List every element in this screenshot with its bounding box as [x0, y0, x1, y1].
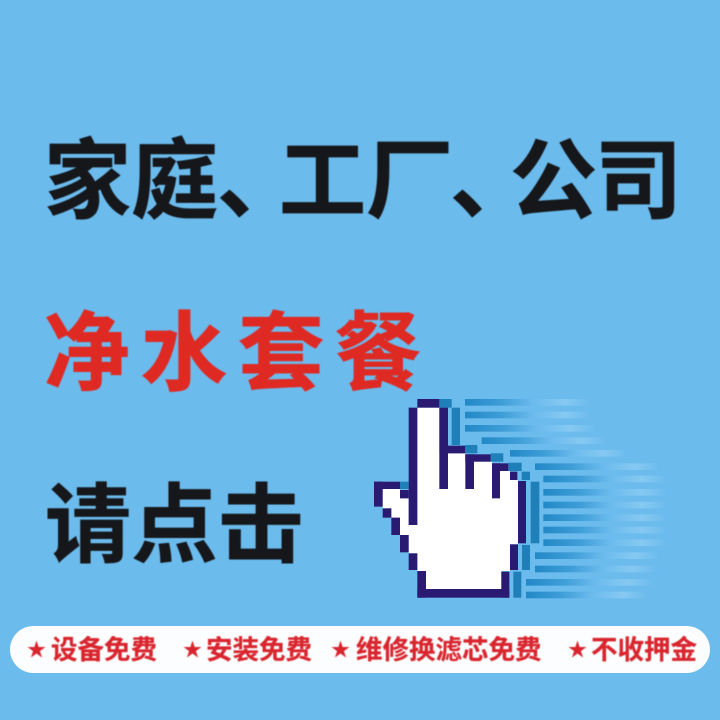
heading: 家庭、工厂、公司: 厂	[366, 133, 453, 230]
star: 维修换滤芯免费: ★	[331, 640, 350, 661]
heading: 家庭、工厂、公司: 、	[217, 133, 304, 230]
benefit: 维修换滤芯免费: 维修换滤芯免费	[356, 635, 542, 665]
panel: benefits pill	[10, 626, 710, 673]
heading: 家庭、工厂、公司: 、	[450, 133, 537, 230]
heading: 家庭、工厂、公司: 家	[44, 133, 131, 230]
star: 安装免费: ★	[183, 640, 202, 661]
star: 不收押金: ★	[568, 640, 587, 661]
heading: 家庭、工厂、公司: 司	[595, 133, 682, 230]
icon: pixel hand cursor with motion streaks	[374, 399, 659, 598]
heading: 家庭、工厂、公司: 工	[279, 133, 366, 230]
heading: 家庭、工厂、公司: 庭	[131, 133, 218, 230]
heading: 家庭、工厂、公司: 公	[510, 133, 597, 230]
heading: 净水套餐: 净水套餐	[44, 306, 432, 402]
benefit: 设备免费: 设备免费	[51, 635, 157, 665]
star: 设备免费: ★	[27, 640, 46, 661]
heading: 家庭、工厂、公司	[44, 133, 682, 230]
benefit: 安装免费: 安装免费	[206, 635, 312, 665]
benefit: 不收押金: 不收押金	[591, 635, 697, 665]
heading: 请点击: 请点击	[45, 478, 304, 574]
